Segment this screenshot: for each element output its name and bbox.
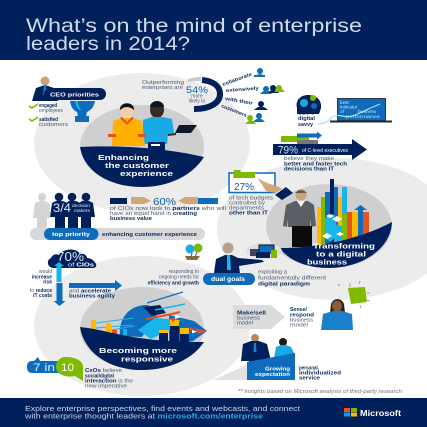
curved text: collaborate extensively with their customers: collaborate xyxy=(222,72,253,88)
heading: experience xyxy=(120,169,173,178)
icon: three quarters decision makers: decision xyxy=(72,203,91,208)
callout: 7 in 10: CxOs believe xyxy=(85,368,122,374)
footer: Explore enterprise perspectives, find events and webcasts, and connect xyxy=(25,406,300,413)
heading xyxy=(99,346,177,364)
callout: 7 in 10: interaction is the xyxy=(85,378,133,384)
callout: 7 in 10: social/digital xyxy=(85,374,115,380)
footnote: ** Insights based on Microsoft analysis of third-party research xyxy=(238,389,402,395)
callout: 27 percent: other than IT xyxy=(229,210,268,216)
text: digital paradigm xyxy=(258,270,327,288)
icon: woman with headset and dial xyxy=(321,281,370,330)
callout: 54 percent: enterprises are xyxy=(142,85,183,91)
callout: 54 percent xyxy=(142,77,220,109)
heading: Enhancing xyxy=(98,153,150,162)
text: efficiency and growth: responding to xyxy=(169,269,199,275)
arrow: business agility: business agility xyxy=(69,294,115,300)
text: efficiency and growth: efficiency and growth xyxy=(148,280,199,286)
arrow: risk and cost: IT costs xyxy=(33,293,52,299)
callout: 7 in 10: 10 xyxy=(61,362,74,374)
icon: businessman xyxy=(283,190,316,247)
curved text: collaborate extensively with their customers: with their xyxy=(223,96,253,107)
panel: becoming more responsive xyxy=(34,256,250,396)
icon: dual goals man and devices xyxy=(214,242,282,273)
callout: 60 percent partners: business value xyxy=(110,216,152,222)
text: sense/respond: model xyxy=(290,322,308,328)
callout: 7 in 10: new imperative xyxy=(85,384,127,390)
heading: responsive xyxy=(121,354,173,364)
heading xyxy=(98,153,173,178)
label pill: dual goals xyxy=(203,273,255,285)
panel: CEO priorities xyxy=(29,76,106,128)
panel: growing expectation: Growing xyxy=(265,366,290,372)
icon: three quarters decision makers xyxy=(33,193,95,229)
text: efficiency and growth: ongoing needs for xyxy=(159,274,199,280)
callout: 79 percent arrow: of C-level executives xyxy=(302,148,348,154)
callout: 54 percent: 54% xyxy=(186,85,209,96)
panel: growing expectation: personal, xyxy=(299,366,320,372)
make/sell arrow: business xyxy=(237,316,261,322)
panel: growing expectation xyxy=(213,334,341,382)
heading: business xyxy=(307,258,347,266)
icon: laptop with indicator chart: performance xyxy=(346,114,381,119)
panel: enhancing the customer experience xyxy=(34,73,250,213)
heading xyxy=(307,242,376,266)
arrow: business agility xyxy=(69,280,122,300)
callout: 60 percent partners xyxy=(110,197,226,222)
panel: transforming to a digital business xyxy=(217,158,427,300)
curved text: collaborate extensively with their customers: customers xyxy=(220,103,248,119)
icon: woman in yellow xyxy=(108,103,146,146)
label pill: dual goals: dual goals xyxy=(211,277,246,283)
text: sense/respond: respond xyxy=(290,312,314,318)
icon: laptop with indicator chart: indicator xyxy=(340,104,358,110)
callout: 79 percent arrow: 79% xyxy=(278,144,298,156)
arrow: risk and cost: increase xyxy=(32,274,52,280)
icon: three quarters decision makers: 3/4 xyxy=(53,201,71,215)
heading: Becoming more xyxy=(99,346,177,355)
icon: businessman and assistant xyxy=(241,334,295,363)
text: sense/respond: business xyxy=(290,318,314,324)
checklist: satisfied xyxy=(39,117,58,123)
callout: 70 percent of CIOs: 70% xyxy=(57,250,84,264)
icon: man in blue with tablet xyxy=(143,101,197,152)
checklist: engaged xyxy=(39,103,57,109)
footer: with enterprise thought leaders at microsoft.com/enterprise xyxy=(24,414,263,420)
text: sense/respond: Sense/ xyxy=(290,307,308,313)
callout: 54 percent: likely to xyxy=(189,98,206,104)
checklist: customers xyxy=(39,122,69,128)
callout: CEO's digital savvy: digital xyxy=(298,116,316,122)
callout: 54 percent: more xyxy=(191,94,203,100)
icon: laptop with indicator chart: best xyxy=(340,100,349,105)
icon: trophy xyxy=(70,101,95,122)
callout: 54 percent: Outperforming xyxy=(142,80,184,86)
callout: 27 percent: of tech budgets xyxy=(229,196,274,202)
bar chart xyxy=(317,179,369,246)
callout: 79 percent arrow: better and faster tech xyxy=(284,162,347,168)
header banner: What’s on the mind of enterprise xyxy=(26,16,362,37)
Microsoft logo xyxy=(344,408,401,418)
callout: CEO's digital savvy xyxy=(297,95,321,128)
callout: 60 percent partners: have an equal hand in creating xyxy=(110,211,197,217)
callout: 60 percent partners: of CIOs now look to partners who will xyxy=(110,206,226,212)
heading: to a digital xyxy=(316,250,366,258)
icon: laptop with indicator chart xyxy=(318,98,392,124)
header banner xyxy=(0,0,427,60)
icon: plant xyxy=(185,244,202,260)
illustration: speed graph xyxy=(91,292,207,345)
panel: growing expectation: expectation xyxy=(255,372,290,378)
make/sell arrow: Make/sell xyxy=(237,310,267,316)
heading: Transforming xyxy=(313,242,376,250)
arrow: risk and cost xyxy=(30,262,66,306)
header banner: leaders in 2014? xyxy=(26,34,190,55)
make/sell arrow: model xyxy=(237,320,253,326)
callout: 60 percent partners: 60% xyxy=(153,197,176,208)
make/sell arrow xyxy=(233,305,285,329)
icon: laptop with indicator chart: business xyxy=(358,109,377,114)
arrow: risk and cost: to reduce xyxy=(30,288,52,294)
text: efficiency and growth xyxy=(148,269,199,286)
callout: 27 percent: 27% xyxy=(234,182,254,193)
curved text: collaborate extensively with their customers xyxy=(220,72,259,119)
top priority bar: enhancing customer experience xyxy=(102,232,197,238)
text: digital paradigm: digital paradigm xyxy=(258,282,311,288)
top priority bar: top priority xyxy=(52,232,90,238)
arrow: risk and cost: would xyxy=(39,269,52,275)
callout: 27 percent xyxy=(229,170,293,216)
checklist: employees xyxy=(39,108,63,114)
callout: CEO's digital savvy: CEO’s xyxy=(298,110,314,116)
Microsoft logo: Microsoft xyxy=(360,408,401,418)
footer xyxy=(0,398,427,427)
callout: 79 percent arrow xyxy=(273,132,367,172)
text: digital paradigm: exploiting a xyxy=(258,270,287,276)
curved text: collaborate extensively with their customers: extensively xyxy=(226,86,259,94)
callout: 70 percent of CIOs xyxy=(48,250,96,268)
icon: people group xyxy=(245,68,285,124)
text: digital paradigm: fundamentally different xyxy=(258,276,327,282)
callout: 79 percent arrow: believe they make xyxy=(284,156,334,162)
panel: growing expectation: individualized xyxy=(299,370,341,376)
icon: laptop with indicator chart: of xyxy=(340,109,345,114)
text: sense/respond xyxy=(290,307,314,328)
callout: CEO's digital savvy: savvy xyxy=(298,122,313,128)
callout: 27 percent: controlled by xyxy=(229,200,266,206)
checklist xyxy=(29,103,69,128)
label pill: CEO priorities xyxy=(50,92,99,98)
arrow: business agility: and accelerate xyxy=(69,288,111,294)
callout: 70 percent of CIOs: of CIOs xyxy=(68,262,94,268)
callout: 79 percent arrow: decisions than IT xyxy=(284,166,334,172)
callout: 27 percent: departments xyxy=(229,206,265,212)
callout: 7 in 10: 7 in xyxy=(33,362,55,374)
arrow: risk and cost: risk xyxy=(43,280,52,286)
icon: CEO figure xyxy=(32,76,58,101)
top priority bar xyxy=(30,228,205,240)
callout: 7 in 10 xyxy=(27,357,133,390)
heading: the customer xyxy=(105,161,169,170)
panel: growing expectation: service xyxy=(299,376,320,382)
icon: three quarters decision makers: makers xyxy=(74,208,91,213)
